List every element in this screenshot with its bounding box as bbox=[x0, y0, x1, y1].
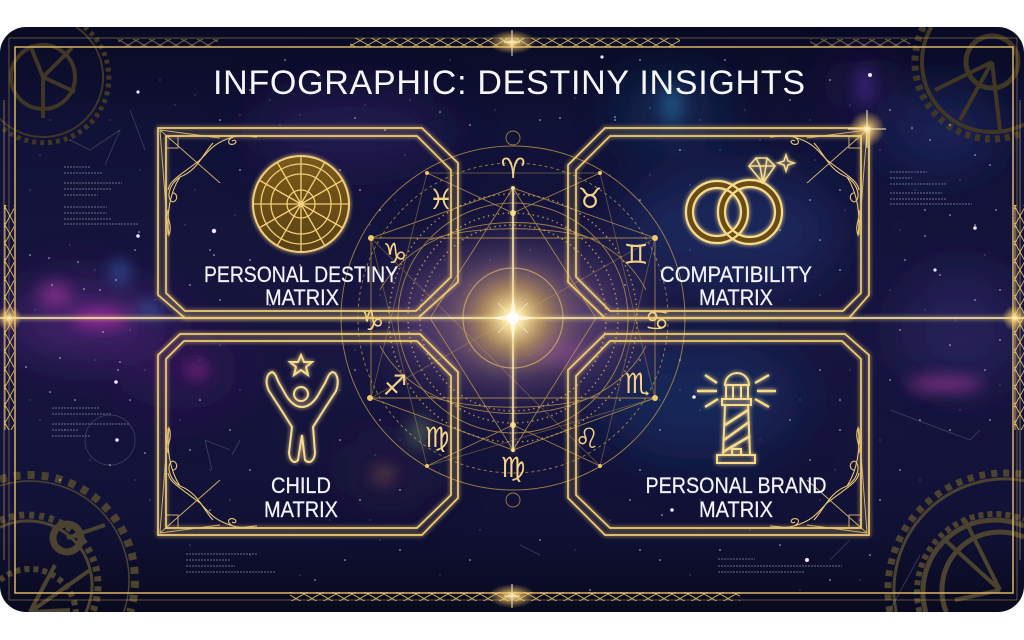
label: COMPATIBILITY bbox=[660, 262, 812, 287]
label: MATRIX bbox=[699, 497, 773, 522]
panel: child matrix bbox=[158, 334, 458, 535]
faint star dust bbox=[30, 60, 1000, 590]
corner ornament bbox=[770, 130, 867, 235]
title: INFOGRAPHIC: DESTINY INSIGHTS bbox=[213, 64, 805, 102]
label bbox=[646, 473, 826, 522]
label: MATRIX bbox=[699, 285, 773, 310]
nebula clouds bbox=[5, 60, 1020, 500]
label: PERSONAL DESTINY bbox=[204, 262, 398, 287]
panel: compatibility matrix bbox=[568, 110, 886, 318]
nebula accents bbox=[39, 65, 983, 483]
bright stars bbox=[114, 55, 977, 562]
faint notes: left and right margins bbox=[52, 167, 972, 572]
panel frame bbox=[158, 128, 458, 318]
gear: top left bbox=[0, 27, 109, 143]
zodiac glyphs: ♋︎ bbox=[644, 305, 670, 336]
zodiac glyphs: ♌︎ bbox=[574, 423, 600, 454]
label: MATRIX bbox=[264, 497, 338, 522]
corner sparkle bbox=[848, 110, 886, 148]
zodiac glyphs: ♏︎ bbox=[624, 368, 650, 399]
label bbox=[205, 266, 398, 306]
label: PERSONAL BRAND bbox=[646, 473, 826, 498]
icon: wedding rings bbox=[686, 155, 794, 244]
icon: child with star bbox=[267, 355, 338, 462]
panel frame bbox=[568, 334, 869, 535]
panel: personal brand matrix bbox=[568, 334, 869, 535]
panel frame bbox=[568, 128, 869, 318]
zodiac glyphs: ♍︎ bbox=[500, 452, 526, 483]
zodiac glyphs: ♊︎ bbox=[623, 239, 649, 270]
corner ornament bbox=[160, 130, 257, 235]
central light cross bbox=[0, 187, 1024, 452]
zodiac glyphs: ♍︎ bbox=[424, 422, 450, 453]
panel frame bbox=[158, 334, 458, 535]
astrolabe dotted rings bbox=[389, 194, 637, 442]
zodiac glyphs: ♑︎ bbox=[382, 238, 408, 269]
label: MATRIX bbox=[265, 285, 339, 310]
icon: lighthouse bbox=[697, 372, 776, 463]
zodiac glyphs: ♐︎ bbox=[382, 370, 408, 401]
gear: top right bbox=[915, 27, 1024, 139]
faint constellations bbox=[70, 110, 980, 610]
astrolabe diagram bbox=[341, 131, 685, 507]
label bbox=[266, 477, 338, 518]
astrolabe nodes bbox=[367, 171, 658, 468]
panel: personal destiny matrix bbox=[158, 128, 458, 318]
zodiac glyphs bbox=[359, 153, 670, 483]
gear: bottom right bbox=[888, 473, 1024, 612]
star field bbox=[26, 60, 1000, 590]
label bbox=[660, 266, 812, 306]
gear: bottom left bbox=[0, 475, 135, 612]
zodiac glyphs: ♑︎ bbox=[359, 305, 385, 336]
zodiac glyphs: ♈︎ bbox=[500, 153, 526, 184]
zodiac glyphs: ♓︎ bbox=[428, 184, 454, 215]
corner ornament bbox=[160, 428, 257, 533]
corner ornament bbox=[770, 428, 867, 533]
zodiac glyphs: ♉︎ bbox=[577, 183, 603, 214]
label: CHILD bbox=[271, 473, 331, 498]
icon: astrology wheel bbox=[253, 156, 349, 252]
